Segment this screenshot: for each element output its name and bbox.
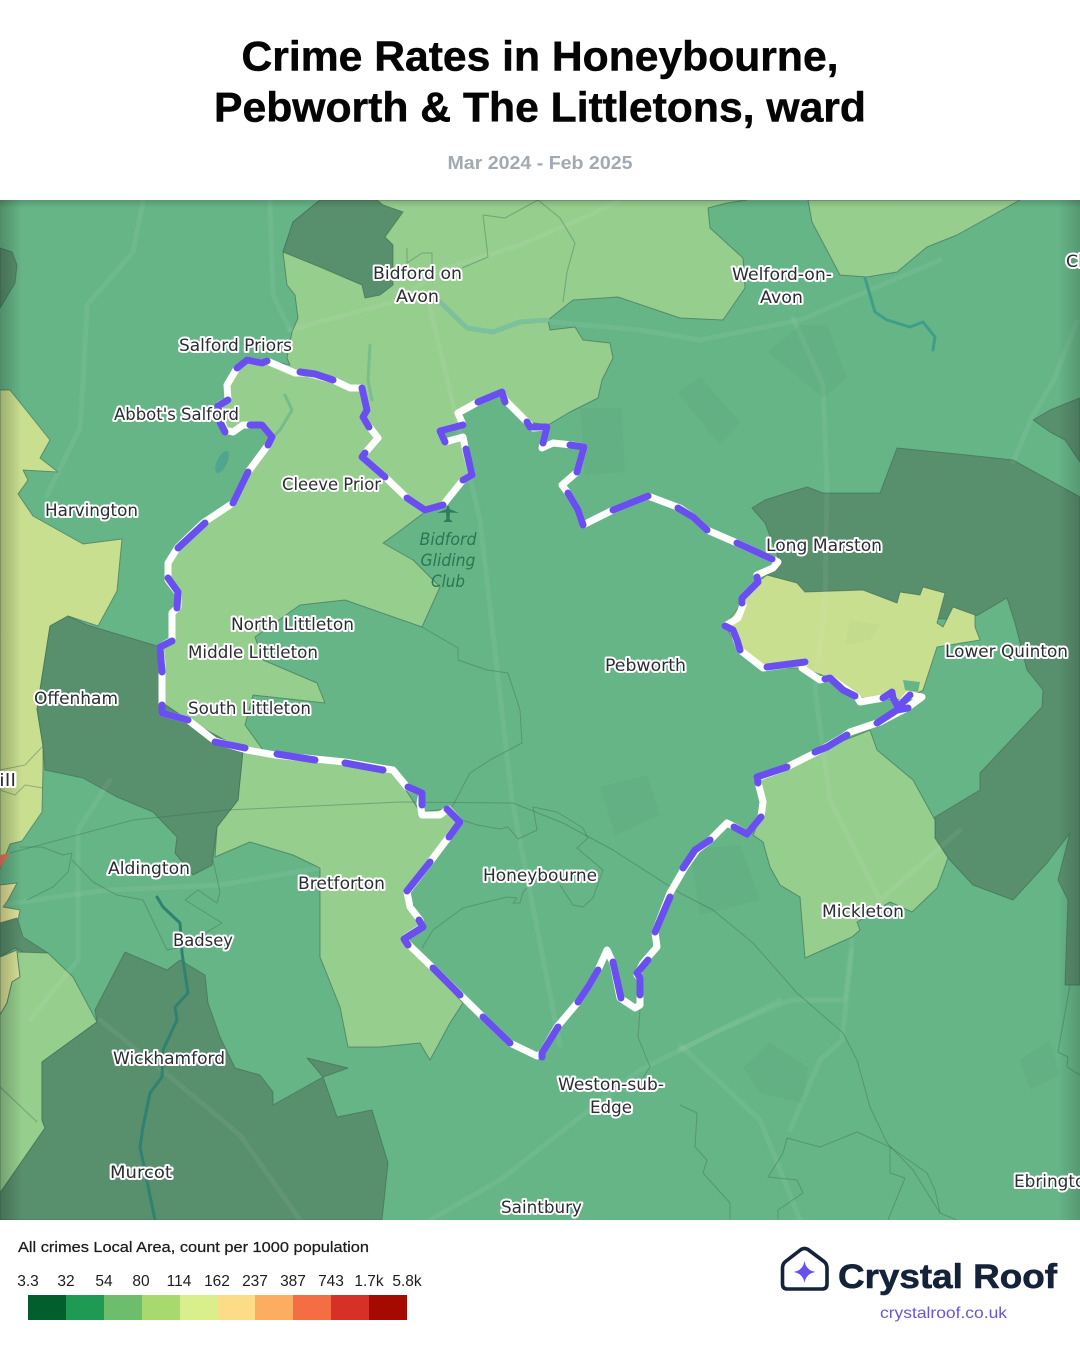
legend values: 5.8k	[392, 1273, 422, 1290]
legend colour scale	[28, 1295, 407, 1320]
place labels: South Littleton	[188, 699, 311, 719]
place labels: Honeybourne	[483, 866, 597, 886]
place labels: Avon	[396, 287, 439, 307]
region: pale west	[0, 390, 122, 869]
label: Bidford Gliding Club: Club	[431, 572, 465, 592]
icon: house with star	[782, 1248, 827, 1289]
place labels: Badsey	[173, 931, 233, 951]
title	[214, 32, 866, 130]
land use patches	[580, 325, 1060, 1103]
subtitle: date range: Mar 2024 - Feb 2025	[448, 153, 632, 173]
legend values: 1.7k	[354, 1273, 384, 1290]
legend title: All crimes Local Area, count per 1000 population	[18, 1239, 369, 1256]
place labels: Bidford on	[373, 264, 462, 284]
legend values: 80	[132, 1273, 150, 1290]
place labels: Harvington	[45, 501, 138, 521]
place labels: North Littleton	[231, 615, 354, 635]
place labels: Cleeve Prior	[282, 475, 381, 495]
region: dark fragment	[0, 918, 48, 962]
title: Pebworth & The Littletons, ward	[214, 84, 866, 130]
legend values: 32	[57, 1273, 75, 1290]
label: Bidford Gliding Club: Bidford	[420, 530, 477, 550]
place labels: Long Marston	[766, 536, 882, 556]
place labels: Edge	[590, 1098, 632, 1118]
region: dark green Offenham	[37, 616, 243, 875]
rivers and streams	[140, 278, 935, 1220]
boundary: purple dashes	[160, 360, 910, 1057]
legend values: 237	[242, 1273, 268, 1290]
region: dark green Long Marston and Quinton	[752, 448, 1080, 985]
boundary: white outline	[160, 360, 922, 1056]
legend values: 114	[167, 1273, 192, 1290]
region: light green Bretforton	[215, 750, 463, 1060]
place labels: Weston-sub-	[558, 1075, 664, 1095]
region: dark green far right patch	[1033, 398, 1080, 462]
label: Bidford Gliding Club: Gliding	[420, 551, 476, 571]
region: pale fragment lower	[0, 950, 20, 1015]
place labels: Lower Quinton	[945, 642, 1068, 662]
logo: Crystal Roof	[782, 1248, 1058, 1322]
region: light green south-west	[0, 952, 97, 1193]
place labels: Avon	[760, 288, 803, 308]
title: Crime Rates in Honeybourne,	[242, 32, 838, 80]
place labels: Welford-on-	[732, 265, 832, 285]
ward boundary	[160, 360, 922, 1057]
region: light green Mickleton	[753, 730, 948, 958]
map panel	[0, 200, 1080, 1220]
region: light green north-east	[808, 200, 1020, 277]
boundary lines	[0, 200, 1080, 1220]
legend values: 54	[95, 1273, 113, 1290]
region: small green patch	[903, 680, 920, 692]
roads	[0, 200, 1077, 1220]
region: dark green top-left sliver	[0, 248, 17, 308]
region: dark green Wickhamford	[0, 952, 388, 1220]
place labels: Salford Priors	[179, 336, 292, 356]
place labels: Middle Littleton	[188, 643, 318, 663]
place labels: Abbot's Salford	[114, 405, 239, 425]
legend values: 743	[318, 1273, 344, 1290]
place labels: Offenham	[34, 689, 118, 709]
place labels: Aldington	[108, 859, 190, 879]
region: light green Cleeve Prior and Bidford	[160, 200, 747, 750]
logo wordmark: Crystal Roof	[838, 1258, 1058, 1296]
place labels: Wickhamford	[113, 1049, 225, 1069]
label: Bidford Gliding Club	[420, 530, 477, 592]
region: dark green north of Bidford	[283, 200, 403, 298]
logo url: crystalroof.co.uk	[880, 1305, 1008, 1322]
legend values	[17, 1273, 422, 1290]
place labels: Bretforton	[298, 874, 385, 894]
place labels: Saintbury	[501, 1198, 582, 1218]
place labels	[0, 252, 1080, 1218]
legend values: 387	[280, 1273, 306, 1290]
map edge shading	[0, 200, 1080, 1220]
region: pale darker patch	[845, 620, 880, 645]
place labels: Pebworth	[605, 656, 686, 676]
legend values: 3.3	[17, 1273, 39, 1290]
place labels: Mickleton	[822, 902, 904, 922]
place labels: Murcot	[110, 1163, 172, 1183]
icon: airfield plane	[437, 506, 459, 522]
legend values: 162	[204, 1273, 230, 1290]
region: pale green Long Marston south	[725, 575, 980, 700]
region: red patch	[0, 853, 10, 868]
region: pale fragment	[0, 883, 20, 925]
legend	[17, 1239, 422, 1320]
